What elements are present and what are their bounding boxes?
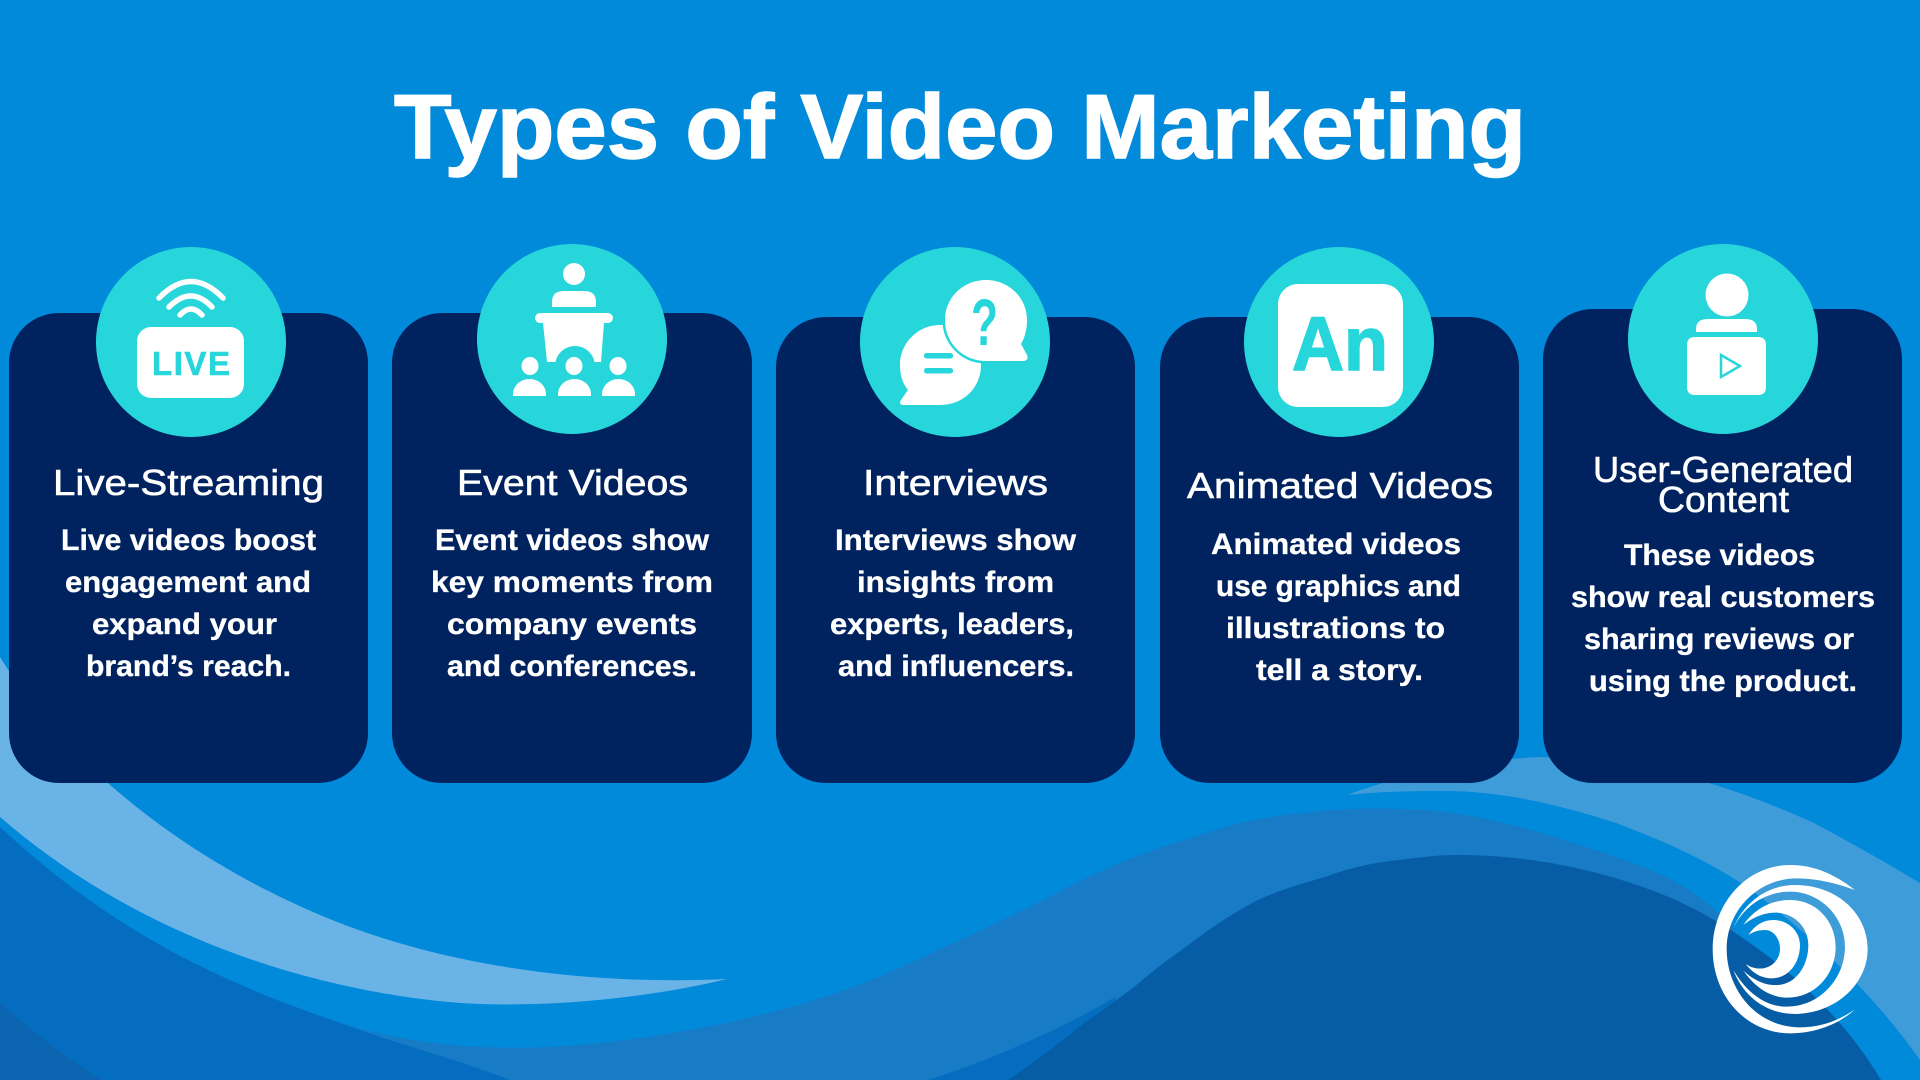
panel: user-generated content — [1543, 244, 1902, 783]
description — [61, 524, 316, 683]
description: using the product. — [1589, 665, 1857, 698]
icon circle — [96, 247, 286, 437]
description: and conferences. — [447, 650, 697, 683]
icon circle — [477, 244, 667, 434]
card background — [776, 317, 1135, 783]
heading: Event Videos — [457, 462, 688, 503]
heading — [1593, 449, 1853, 520]
panel: interviews — [776, 247, 1135, 783]
title: Types of Video Marketing — [394, 77, 1526, 178]
description — [1211, 528, 1461, 687]
heading: Animated Videos — [1187, 465, 1493, 506]
description: brand’s reach. — [86, 650, 291, 683]
icon circle — [1244, 247, 1434, 437]
heading: User-Generated — [1593, 449, 1853, 490]
description: Interviews show — [835, 524, 1077, 557]
description: Event videos show — [435, 524, 710, 557]
description: tell a story. — [1256, 654, 1423, 687]
panel: live-streaming — [9, 247, 368, 783]
icon: animate app — [1278, 284, 1403, 407]
icon: speech bubbles: ? — [971, 285, 998, 359]
card background — [1543, 309, 1902, 783]
heading: Content — [1658, 479, 1789, 520]
icon circle — [1628, 244, 1818, 434]
icon: speech bubbles — [900, 280, 1028, 405]
background waves — [0, 657, 1920, 1080]
card background — [1160, 317, 1519, 783]
icon: live broadcast — [137, 282, 244, 398]
card background — [9, 313, 368, 783]
description: use graphics and — [1216, 570, 1461, 603]
description: These videos — [1624, 539, 1815, 572]
heading: Live-Streaming — [53, 462, 324, 503]
icon circle — [860, 247, 1050, 437]
description: engagement and — [65, 566, 311, 599]
description — [830, 524, 1077, 683]
description: company events — [447, 608, 697, 641]
icon: animate app: An — [1292, 302, 1388, 387]
description: illustrations to — [1226, 612, 1445, 645]
description — [431, 524, 713, 683]
description: key moments from — [431, 566, 713, 599]
logo: white swirl — [1713, 865, 1868, 1033]
description: sharing reviews or — [1584, 623, 1854, 656]
description: Animated videos — [1211, 528, 1461, 561]
icon: presenter at podium with audience — [513, 263, 635, 396]
description: expand your — [92, 608, 277, 641]
description: insights from — [857, 566, 1054, 599]
description: experts, leaders, — [830, 608, 1074, 641]
icon: user with video — [1687, 274, 1766, 395]
panel: event videos — [392, 244, 752, 783]
description: show real customers — [1571, 581, 1875, 614]
heading: Interviews — [863, 462, 1048, 503]
icon: live broadcast: LIVE — [152, 345, 230, 382]
description: and influencers. — [838, 650, 1074, 683]
description — [1571, 539, 1875, 698]
panel: animated videos — [1160, 247, 1519, 783]
description: Live videos boost — [61, 524, 316, 557]
card background — [392, 313, 752, 783]
